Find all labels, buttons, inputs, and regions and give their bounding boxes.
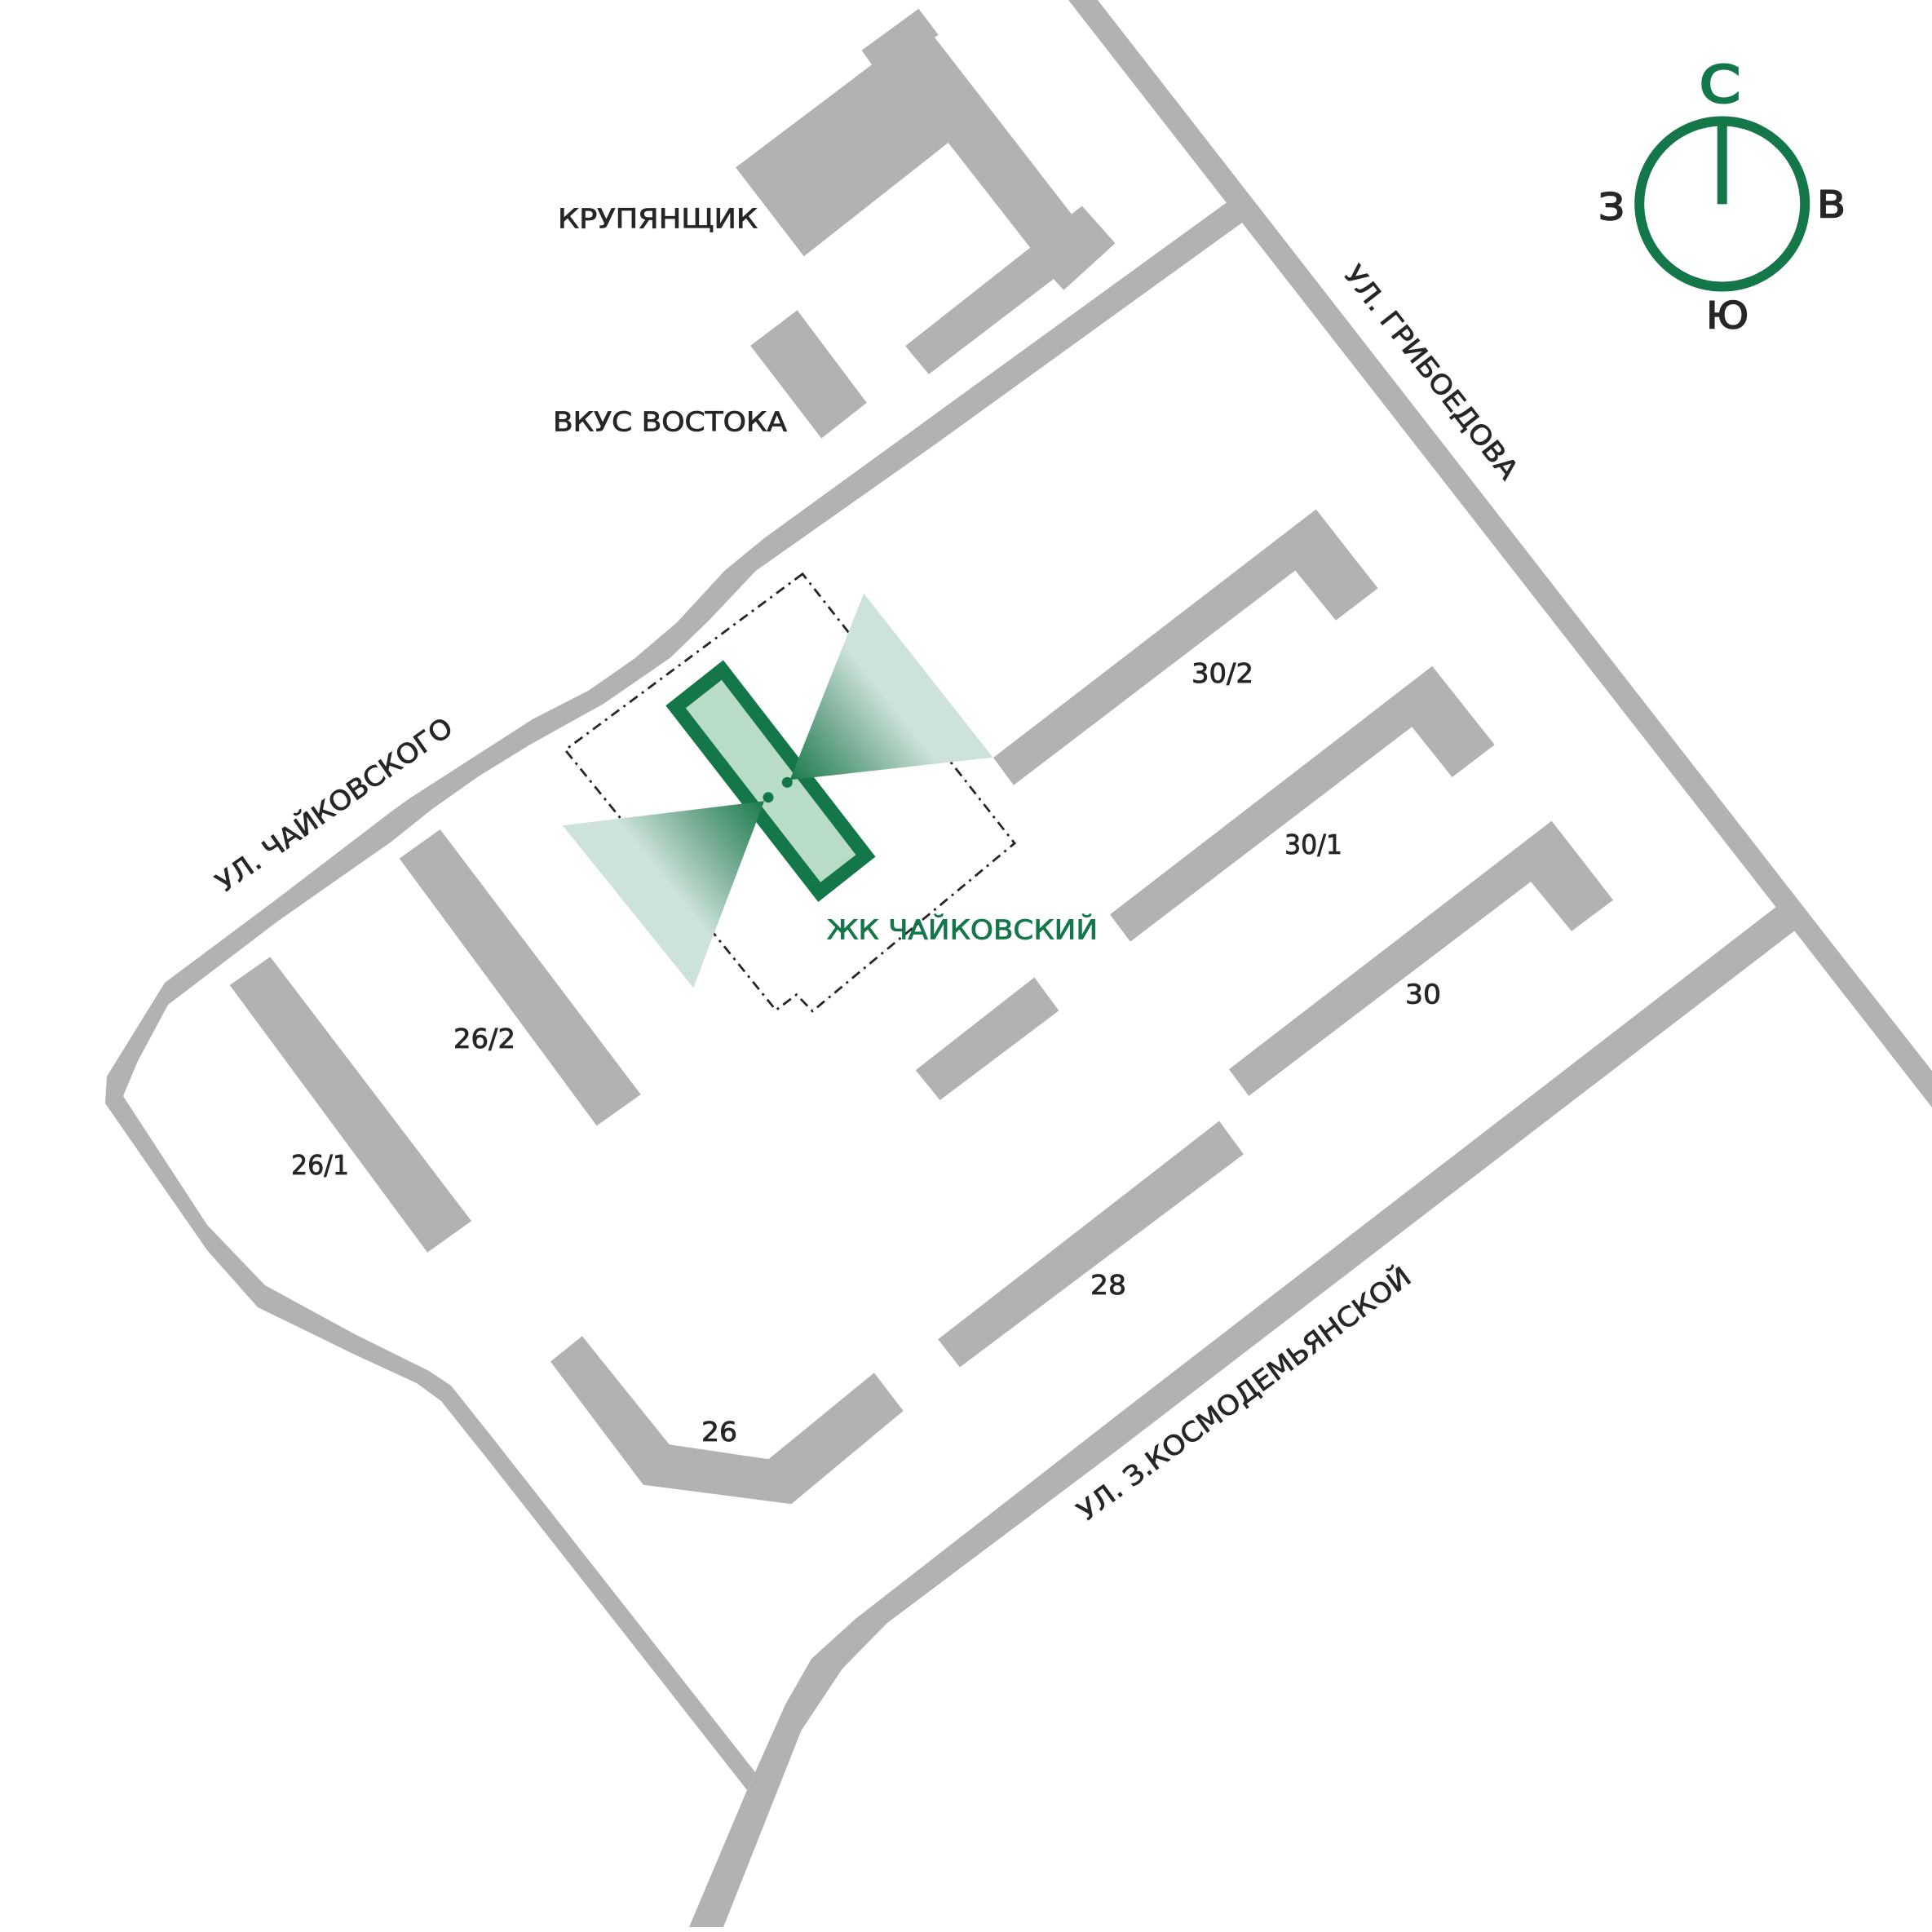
site boundary [565, 574, 1015, 1011]
buildings [230, 9, 1613, 1504]
building: 26/1 [230, 957, 471, 1253]
building: unnamed block [916, 977, 1059, 1100]
road: ул. Чайковского and western loop [105, 199, 1248, 1790]
label: ул. Грибоедова: УЛ. ГРИБОЕДОВА [1337, 259, 1525, 485]
label: 30/1: 30/1 [1284, 829, 1342, 860]
label: ул. Чайковского: УЛ. ЧАЙКОВСКОГО [210, 710, 458, 899]
label: ЖК Чайковский: ЖК ЧАЙКОВСКИЙ [827, 913, 1098, 946]
compass needle [1718, 121, 1727, 204]
building: 26 [550, 1336, 904, 1504]
label: Вкус Востока: ВКУС ВОСТОКА [553, 406, 787, 437]
building: Крупянщик [736, 9, 1116, 374]
building: 30/1 [1110, 666, 1495, 942]
view cone: south-west [563, 801, 764, 988]
compass ring [1639, 121, 1805, 287]
building: 30/2 [993, 509, 1378, 785]
building: 28 [938, 1121, 1244, 1367]
label: 30/2: 30/2 [1191, 657, 1253, 689]
building: ЖК Чайковский highlighted [665, 660, 876, 902]
label: 26/2: 26/2 [453, 1023, 515, 1054]
compass [1598, 55, 1846, 338]
road: ул. З.Космодемьянской [689, 904, 1802, 1927]
label: 26/1: 26/1 [291, 1149, 349, 1181]
label: 26: 26 [701, 1416, 737, 1448]
viewpoint dot: south-west [763, 792, 773, 802]
building: Вкус Востока [750, 310, 867, 439]
compass: west: З [1598, 186, 1625, 228]
building: 26/2 [400, 829, 641, 1125]
compass: east: В [1817, 183, 1846, 227]
building: 30 [1229, 821, 1613, 1096]
label: 28: 28 [1090, 1269, 1126, 1301]
viewpoint dot: north-east [782, 777, 793, 788]
view cone: north-east [790, 594, 993, 780]
label: ул. З.Космодемьянской: УЛ. З.КОСМОДЕМЬЯНСКОЙ [1071, 1260, 1417, 1527]
compass: south: Ю [1706, 294, 1749, 338]
compass: north: С [1700, 55, 1740, 114]
label: Крупянщик: КРУПЯНЩИК [558, 202, 758, 235]
road: ул. Грибоедова [1068, 0, 1932, 1107]
label: 30: 30 [1405, 979, 1441, 1010]
